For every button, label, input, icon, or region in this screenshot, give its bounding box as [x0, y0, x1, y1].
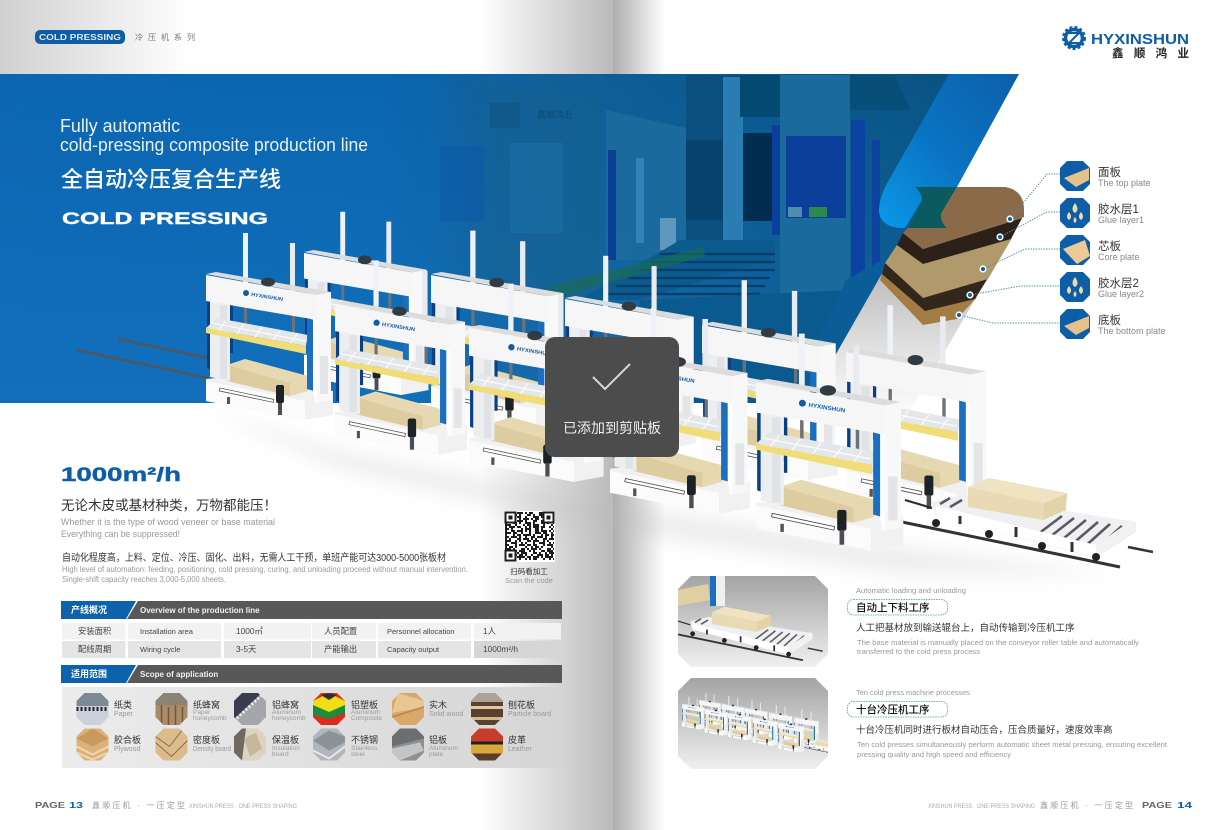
material: particle board: 刨花板 — [508, 699, 535, 710]
left page top band — [0, 0, 190, 74]
grey shadow band behind wood stack — [808, 215, 1024, 420]
material: leather — [471, 728, 532, 760]
hero title — [60, 116, 368, 228]
material: solid wood: 实木 — [429, 699, 447, 710]
layer legend: top plate: 面板 — [1098, 165, 1121, 179]
material: density board — [156, 728, 231, 760]
material: aluminum composite — [313, 693, 382, 725]
material: solid wood — [392, 693, 463, 725]
clipboard toast: 已添加到剪贴板 — [563, 420, 661, 436]
footer left: 13 — [69, 800, 83, 810]
material: paper honeycomb: Paper — [193, 709, 211, 716]
overview table: 1人 — [483, 626, 496, 636]
overview table: Capacity output — [387, 645, 440, 654]
QR caption: 扫码看加工 — [510, 566, 548, 576]
layer legend: core plate: 芯板 — [1098, 239, 1121, 253]
brand logo: 鑫顺鸿业 — [1112, 46, 1189, 60]
hero title: COLD PRESSING — [62, 209, 268, 228]
footer left: 鑫顺压机 · 一压定型 — [92, 800, 185, 810]
layer legend: glue layer 1 — [1060, 198, 1144, 228]
section bar: scope: Scope of application — [140, 670, 218, 679]
description text block — [62, 551, 468, 584]
material: paper — [76, 693, 133, 725]
process text: loading: Automatic loading and unloading — [856, 586, 966, 595]
layer legend: core plate — [1060, 235, 1140, 265]
material: aluminum composite: 铝塑板 — [351, 699, 378, 710]
process text: ten presses: 十台冷压机工序 — [856, 703, 930, 716]
material: aluminum plate: 铝板 — [429, 734, 447, 745]
material: aluminum honeycomb: Aluminum — [272, 709, 301, 716]
production line machines: HYXINSHUN — [808, 403, 845, 414]
material: density board: Density board — [193, 746, 231, 753]
layer legend: glue layer 1: Glue layer1 — [1098, 215, 1144, 225]
material: paper honeycomb — [156, 693, 227, 725]
application panel — [62, 687, 561, 768]
layer markers — [956, 216, 1013, 318]
overview table: 安装面积 — [78, 626, 111, 636]
QR code — [504, 511, 555, 562]
process image: ten presses — [678, 678, 828, 769]
material: plywood: Plywood — [114, 746, 141, 753]
headline text block: Whether it is the type of wood veneer or base material — [61, 517, 275, 527]
material: leather: Leather — [508, 746, 532, 753]
process text: ten presses: 十台冷压机同时进行板材自动压合，压合质量好，速度效率高 — [856, 724, 1113, 736]
material: paper: 纸类 — [114, 699, 132, 710]
production line machines: HYXINSHUN — [381, 322, 416, 333]
process text: loading: 自动上下料工序 — [856, 601, 930, 614]
process text: ten presses: Ten cold press machine processes — [856, 688, 970, 697]
overview table: 1000m²/h — [483, 644, 518, 654]
floor shadow — [206, 410, 1120, 575]
composite board layers — [880, 187, 1024, 325]
process text: loading — [848, 586, 1139, 656]
page shading right — [613, 0, 665, 830]
overview table: Personnel allocation — [387, 627, 455, 636]
hero title: Fully automatic — [60, 116, 180, 136]
overview table: 3-5天 — [236, 644, 257, 654]
blue hero panel with factory photo — [0, 74, 1000, 403]
production line machines: HYXINSHUN — [659, 373, 695, 385]
material: stainless steel: 不锈钢 — [351, 734, 378, 745]
headline text block: 无论木皮或基材种类，万物都能压！ — [61, 497, 277, 513]
description text block: 自动化程度高，上料、定位、冷压、固化、出料，无需人工干预，单班产能可达3000-5000张板材 — [62, 551, 446, 564]
material: aluminum composite: Aluminum — [351, 709, 380, 716]
layer legend: glue layer 1: 胶水层1 — [1098, 202, 1139, 216]
overview table: 产能输出 — [324, 644, 357, 654]
layer legend: top plate — [1060, 161, 1151, 191]
brand logo — [1063, 27, 1189, 60]
process text: ten presses: pressing quality and high speed and efficiency — [857, 750, 1011, 759]
header tag: 冷压机系列 — [135, 32, 200, 42]
section bar: overview: Overview of the production line — [140, 606, 260, 615]
layer legend: bottom plate — [1060, 309, 1166, 339]
footer right: XINSHUN PRESS · ONE-PRESS SHAPING — [928, 803, 1035, 810]
overview table: 1000㎡ — [236, 626, 263, 636]
material: stainless steel: Stainless — [351, 745, 378, 752]
material: stainless steel — [313, 728, 378, 760]
section bar: overview — [61, 601, 562, 619]
material: stainless steel: steel — [351, 751, 365, 758]
material: aluminum honeycomb: 铝蜂窝 — [272, 699, 299, 710]
material: aluminum plate: Aluminum — [429, 745, 458, 752]
material: insulation board: 保温板 — [272, 734, 299, 745]
material: particle board — [471, 693, 551, 725]
section bar: scope: 适用范围 — [71, 668, 107, 679]
overview table: 人员配置 — [324, 626, 357, 636]
layer legend: glue layer 2: 胶水层2 — [1098, 276, 1139, 290]
QR caption: Scan the code — [505, 576, 553, 585]
material: insulation board — [234, 728, 300, 760]
material: solid wood: Solid wood — [429, 711, 463, 718]
header tag: COLD PRESSING — [39, 33, 121, 42]
blue hero panel with factory photo: 鑫顺鸿业 — [537, 109, 573, 120]
footer left: PAGE — [35, 800, 65, 810]
headline text block — [61, 497, 277, 539]
capacity figure: 1000m²/h — [61, 465, 181, 486]
material: particle board: Particle board — [508, 711, 551, 718]
overview table: Installation area — [140, 627, 194, 636]
layer legend: core plate: Core plate — [1098, 252, 1140, 262]
process text: loading: transferred to the cold press process — [857, 647, 980, 656]
overview table: Wiring cycle — [140, 645, 180, 654]
material: leather: 皮革 — [508, 734, 526, 745]
layer legend: glue layer 2 — [1060, 272, 1144, 302]
header tag — [35, 30, 200, 44]
overview table — [62, 623, 561, 658]
material: plywood: 胶合板 — [114, 734, 141, 745]
overview table: 配线周期 — [78, 644, 111, 654]
material: plywood — [76, 728, 141, 760]
hero title: cold-pressing composite production line — [60, 135, 368, 155]
material: aluminum honeycomb — [234, 693, 306, 725]
layer legend: bottom plate: 底板 — [1098, 313, 1121, 327]
material: density board: 密度板 — [193, 734, 220, 745]
footer right: PAGE — [1142, 800, 1172, 810]
material: insulation board: board — [272, 751, 289, 758]
footer left — [35, 800, 297, 810]
infeed rails — [77, 339, 208, 378]
layer legend: top plate: The top plate — [1098, 178, 1151, 188]
material: insulation board: Insulation — [272, 745, 300, 752]
page shading left — [480, 0, 613, 830]
description text block: High level of automation: feeding, positioning, cold pressing, curing, and unloading proceed without manual intervention. — [62, 564, 468, 574]
clipboard toast — [545, 337, 679, 457]
process text: loading: The base material is manually placed on the conveyor roller table and automatically — [857, 638, 1139, 647]
description text block: Single-shift capacity reaches 3,000-5,000 sheets. — [62, 574, 226, 584]
leader lines — [959, 174, 1060, 323]
material: aluminum composite: Composite — [351, 715, 382, 722]
brand logo: HYXINSHUN — [1091, 31, 1189, 48]
footer left: XINSHUN PRESS · ONE-PRESS SHAPING — [189, 803, 297, 810]
footer right — [928, 800, 1192, 810]
headline text block: Everything can be suppressed! — [61, 529, 180, 539]
section bar: scope — [61, 665, 562, 683]
material: paper honeycomb: honeycomb — [193, 715, 227, 722]
production line machines: HYXINSHUN — [251, 292, 284, 303]
QR caption — [505, 566, 553, 585]
layer legend: glue layer 2: Glue layer2 — [1098, 289, 1144, 299]
footer right: 14 — [1177, 800, 1192, 810]
diagonal blue ribbon — [879, 74, 1019, 228]
production line machines: HYXINSHUN — [516, 346, 551, 358]
footer right: 鑫顺压机 · 一压定型 — [1040, 800, 1133, 810]
material: paper: Paper — [114, 711, 133, 718]
process text: ten presses: Ten cold presses simultaneously perform automatic sheet metal pressing, ensuring excellent — [857, 740, 1168, 749]
process text: ten presses — [848, 688, 1168, 759]
material: aluminum honeycomb: honeycomb — [272, 715, 306, 722]
material: aluminum plate — [392, 728, 458, 760]
hero title: 全自动冷压复合生产线 — [61, 167, 281, 192]
layer legend: bottom plate: The bottom plate — [1098, 326, 1166, 336]
process image: loading — [672, 576, 828, 667]
material: paper honeycomb: 纸蜂窝 — [193, 699, 220, 710]
production line machines — [206, 212, 1153, 567]
material: aluminum plate: plate — [429, 751, 443, 758]
section bar: overview: 产线概况 — [71, 604, 107, 615]
process text: loading: 人工把基材放到输送辊台上，自动传输到冷压机工序 — [856, 622, 1075, 634]
